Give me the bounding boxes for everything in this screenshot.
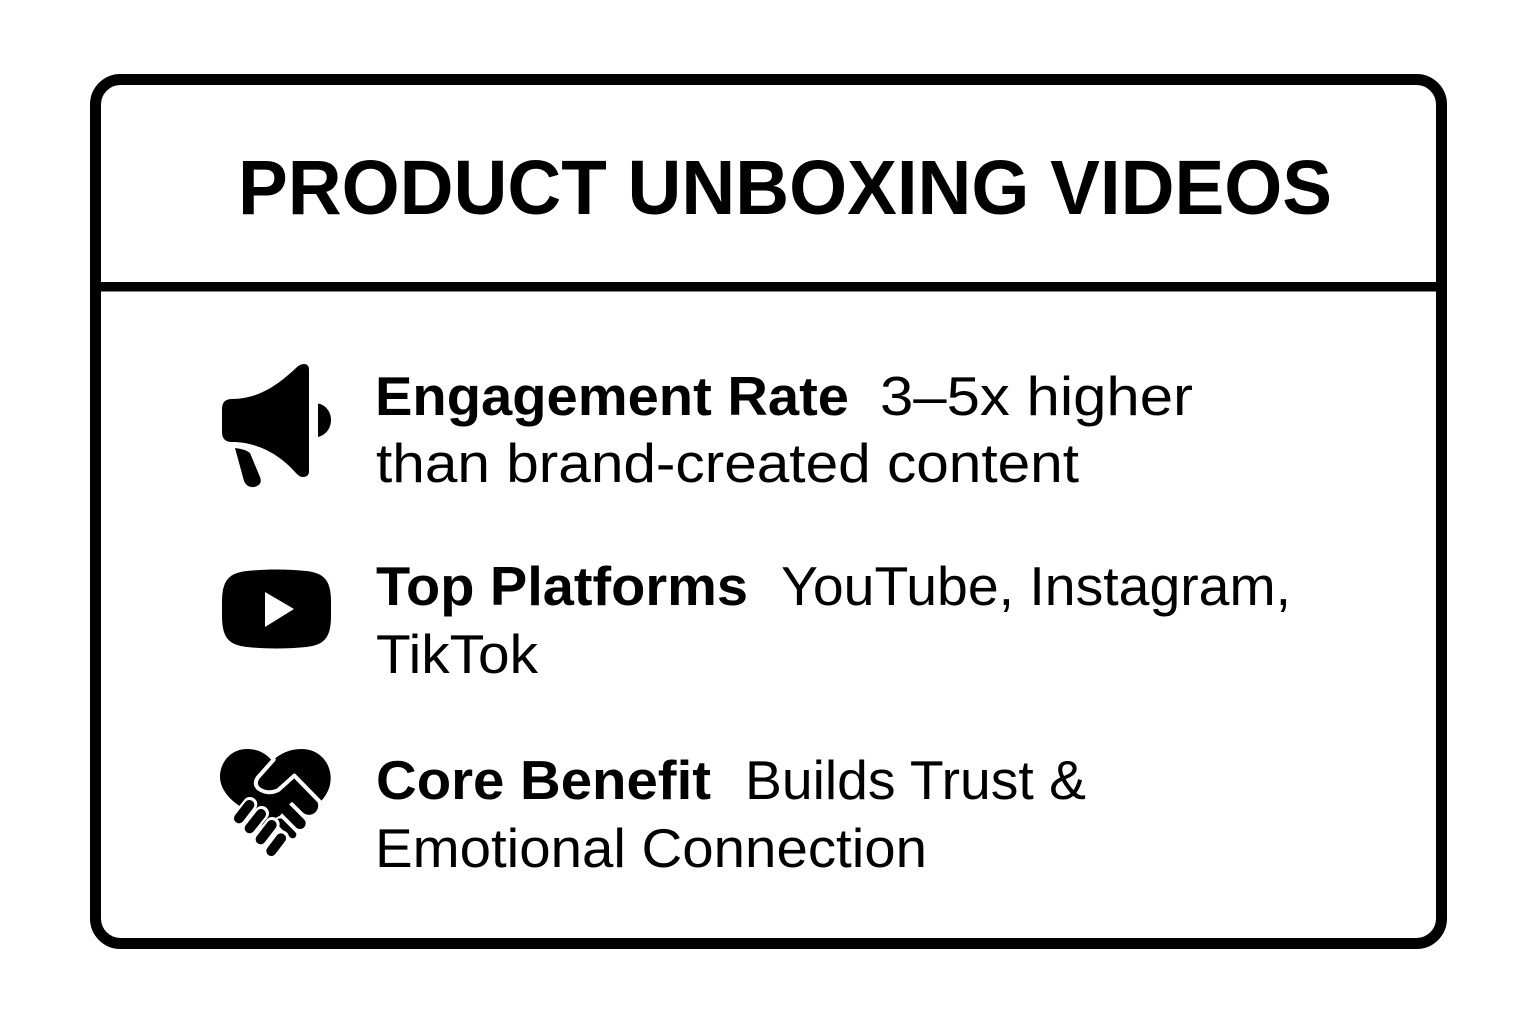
text: engagement rate xyxy=(375,365,1193,494)
text: top platforms: TikTok xyxy=(376,623,539,685)
icon: handshake heart xyxy=(220,749,331,852)
text: engagement rate: than brand-created content xyxy=(376,432,1079,494)
text: core benefit: Emotional Connection xyxy=(375,817,927,879)
text: top platforms xyxy=(376,555,1291,685)
text: top platforms: Top Platforms xyxy=(376,555,748,617)
text: core benefit xyxy=(375,749,1086,879)
text: engagement rate: 3–5x higher xyxy=(880,365,1193,427)
text: engagement rate: Engagement Rate xyxy=(375,365,849,427)
icon: video play button xyxy=(222,570,331,648)
title: PRODUCT UNBOXING VIDEOS xyxy=(238,145,1332,231)
text: top platforms: YouTube, Instagram, xyxy=(781,555,1291,617)
text: core benefit: Core Benefit xyxy=(376,749,711,811)
card frame xyxy=(96,80,1442,944)
icon: megaphone xyxy=(222,364,331,487)
text: core benefit: Builds Trust & xyxy=(745,749,1086,811)
